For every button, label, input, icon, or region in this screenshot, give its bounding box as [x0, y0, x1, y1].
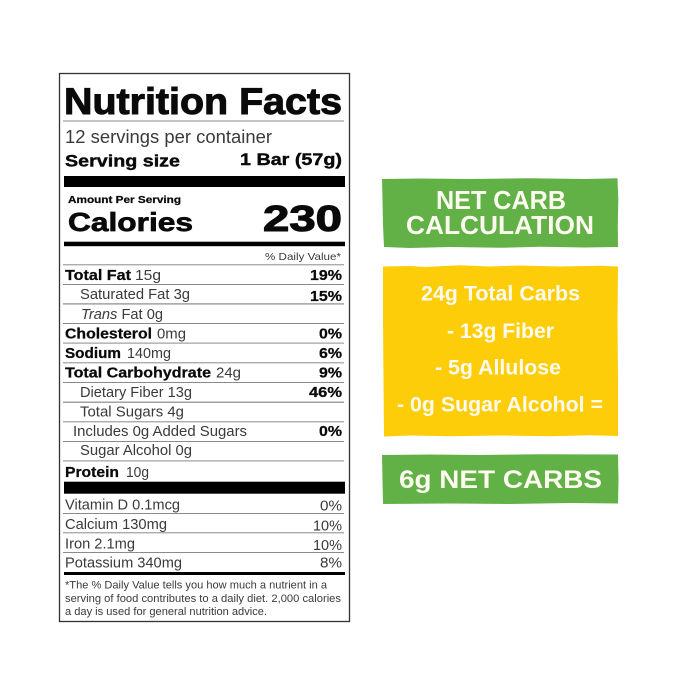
text: serving size: 1 Bar (57g): [240, 151, 342, 169]
panel: calculation steps: - 0g Sugar Alcohol =: [397, 394, 603, 417]
table: vitamins and minerals: Calcium 130mg: [65, 517, 167, 533]
table: vitamins and minerals: Vitamin D 0.1mcg: [65, 497, 180, 513]
table: nutrient rows: Trans Fat 0g: [81, 307, 163, 323]
table: nutrient rows: 0%: [319, 326, 342, 342]
text: calories: Calories: [68, 207, 193, 237]
table: nutrient rows: Includes 0g Added Sugars: [73, 424, 247, 440]
table: nutrient rows: Total Carbohydrate: [65, 366, 211, 382]
panel: net carbs result: 6g NET CARBS: [399, 466, 602, 494]
table: nutrient rows: 46%: [309, 385, 342, 401]
table: nutrient rows: 0%: [319, 424, 342, 440]
text: daily value header: % Daily Value*: [265, 251, 341, 263]
text: footnote: *The % Daily Value tells you how much a nutrient in a: [65, 580, 328, 592]
panel: calculation steps: 24g Total Carbs: [421, 283, 580, 306]
table: vitamins and minerals: [65, 497, 342, 571]
table: nutrient rows: 9%: [319, 366, 342, 382]
table: nutrient rows: Sugar Alcohol 0g: [80, 443, 192, 459]
panel: net carb calculation heading: CALCULATION: [406, 210, 594, 240]
table: nutrient rows: 15g: [135, 268, 161, 284]
table: nutrient rows: 140mg: [127, 346, 171, 362]
table: nutrient rows: 6%: [319, 346, 342, 362]
table: nutrient rows: Total Fat: [65, 268, 131, 284]
panel: calculation steps: - 13g Fiber: [447, 320, 554, 343]
table: nutrient rows: 10g: [126, 465, 149, 481]
table: vitamins and minerals: 10%: [313, 538, 342, 554]
table: vitamins and minerals: 10%: [313, 518, 342, 534]
text: footnote: a day is used for general nutrition advice.: [65, 606, 267, 618]
panel: calculation steps: [383, 265, 618, 436]
heading: Nutrition Facts: Nutrition Facts: [64, 81, 342, 122]
panel: calculation steps: - 5g Allulose: [435, 356, 561, 380]
panel: net carb calculation heading: [382, 178, 618, 248]
table: nutrient rows: [65, 268, 342, 481]
table: vitamins and minerals: Iron 2.1mg: [65, 536, 135, 552]
table: nutrient rows: Cholesterol: [65, 326, 152, 342]
panel: net carbs result: [382, 454, 618, 504]
text: serving size: [65, 151, 342, 170]
table: nutrient rows: Saturated Fat 3g: [80, 287, 190, 303]
table: vitamins and minerals: 8%: [320, 555, 342, 571]
text: footnote: serving of food contributes to a daily diet. 2,000 calories: [65, 593, 342, 605]
panel: net carb calculation heading: NET CARB: [436, 185, 566, 215]
table: nutrient rows: 0mg: [157, 326, 186, 342]
text: calories: [68, 194, 342, 239]
text: footnote: [65, 580, 342, 618]
table: nutrient rows: 15%: [310, 289, 342, 305]
text: calories: Amount Per Serving: [68, 194, 181, 206]
table: nutrient rows: Sodium: [65, 346, 121, 362]
table: nutrient rows: Dietary Fiber 13g: [80, 385, 192, 401]
table: vitamins and minerals: Potassium 340mg: [65, 555, 182, 571]
text: servings per container: 12 servings per container: [65, 127, 272, 147]
table: nutrient rows: Protein: [65, 465, 119, 481]
text: serving size: Serving size: [65, 152, 180, 170]
table: nutrient rows: 19%: [310, 268, 342, 284]
panel: nutrition facts label: [60, 74, 350, 622]
text: calories: 230: [263, 198, 342, 239]
table: nutrient rows: Total Sugars 4g: [80, 404, 184, 420]
table: nutrient rows: 24g: [216, 366, 241, 382]
table: vitamins and minerals: 0%: [320, 499, 342, 515]
